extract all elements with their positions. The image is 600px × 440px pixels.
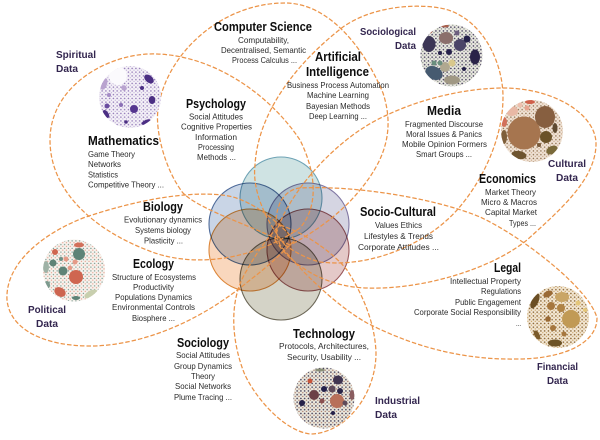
text block: mathematics: Game Theory (88, 149, 136, 159)
text block: media: Moral Issues & Panics (406, 129, 482, 139)
text block: biology: Evolutionary dynamics (124, 214, 202, 224)
text block: media: Fragmented Discourse (405, 119, 483, 129)
text block: computer science: Process Calculus ... (232, 55, 297, 65)
text block: ecology: Structure of Ecosystems (112, 272, 196, 282)
text block: biology: Plasticity ... (144, 236, 183, 246)
data label: spiritual (56, 49, 96, 75)
text block: legal: Corporate Social Responsibility (414, 307, 522, 317)
text block: artificial intelligence: Artificial (315, 50, 361, 64)
text block: computer science: Computability, (238, 35, 289, 45)
text block: sociology: Social Attitudes (176, 350, 230, 360)
text block: sociology: Social Networks (175, 381, 231, 391)
text block: artificial intelligence (287, 50, 389, 121)
central overlapping circles (209, 157, 349, 320)
text block: socio-cultural (358, 205, 439, 252)
text block: ecology: Biosphere ... (132, 313, 175, 323)
text block: mathematics (88, 134, 164, 190)
text block: biology: Biology (143, 200, 183, 214)
text block: technology: Technology (293, 327, 355, 341)
text block: sociology: Theory (191, 371, 216, 381)
text block: economics: Capital Market (485, 207, 538, 217)
data label: sociological: Sociological (360, 26, 416, 38)
text block: artificial intelligence: Machine Learning (307, 90, 369, 100)
text block: technology (279, 327, 369, 362)
data label: spiritual: Spiritual (56, 49, 96, 61)
text block: mathematics: Statistics (88, 170, 118, 180)
text block: computer science: Computer Science (214, 20, 312, 34)
text block: computer science: Decentralised, Semantic (221, 45, 306, 55)
text block: mathematics: Competitive Theory ... (88, 180, 164, 190)
sphere: political data (43, 239, 105, 302)
text block: legal (414, 261, 522, 328)
data label: industrial: Industrial (375, 395, 420, 407)
data label: cultural: Data (556, 172, 578, 184)
text block: media: Smart Groups ... (416, 149, 472, 159)
text block: psychology: Psychology (186, 97, 246, 111)
text block: technology: Security, Usability ... (287, 352, 361, 362)
text block: ecology (112, 257, 196, 323)
text block: psychology: Processing (198, 142, 234, 152)
text block: psychology (181, 97, 252, 162)
text block: artificial intelligence: Bayesian Methods (306, 101, 370, 111)
text block: economics: Micro & Macros (481, 197, 537, 207)
text block: media: Media (427, 104, 462, 118)
text block: psychology: Cognitive Properties (181, 122, 252, 132)
text block: economics: Market Theory (485, 187, 537, 197)
data label: industrial: Data (375, 409, 397, 421)
data label: industrial (375, 395, 420, 421)
data label: political (28, 304, 66, 330)
text block: legal: Intellectual Property (450, 276, 522, 286)
text block: sociology: Plume Tracing ... (174, 392, 232, 402)
text block: mathematics: Mathematics (88, 134, 159, 148)
sphere: industrial data (293, 367, 355, 429)
text block: economics (479, 172, 538, 228)
data label: spiritual: Data (56, 63, 78, 75)
text block: economics: Types ... (509, 218, 536, 228)
data label: cultural (548, 158, 586, 184)
text block: media: Mobile Opinion Formers (402, 139, 487, 149)
text block: economics: Economics (479, 172, 536, 186)
data label: political: Data (36, 318, 58, 330)
data label: political: Political (28, 304, 66, 316)
text block: socio-cultural: Lifestyles & Trends (364, 231, 433, 241)
text block: biology: Systems biology (135, 225, 192, 235)
text block: media (402, 104, 487, 159)
text block: socio-cultural: Values Ethics (375, 220, 422, 230)
text block: mathematics: Networks (88, 159, 121, 169)
data label: financial: Data (547, 375, 568, 387)
sphere: financial data (527, 286, 589, 348)
text block: ecology: Environmental Controls (112, 302, 195, 312)
text block: biology (124, 200, 202, 246)
text block: psychology: Methods ... (197, 152, 236, 162)
text block: artificial intelligence: Intelligence (306, 65, 369, 79)
data label: financial (537, 361, 578, 387)
text block: sociology (174, 336, 232, 402)
text block: sociology: Sociology (177, 336, 229, 350)
text block: legal: Legal (494, 261, 521, 275)
sphere: sociological data (420, 24, 484, 88)
data label: financial: Financial (537, 361, 578, 373)
text block: ecology: Ecology (133, 257, 174, 271)
sphere: cultural data (500, 99, 564, 163)
text block: legal: Public Engagement (455, 297, 522, 307)
text block: socio-cultural: Socio-Cultural (360, 205, 436, 219)
text block: artificial intelligence: Deep Learning ... (309, 111, 367, 121)
text block: technology: Protocols, Architectures, (279, 341, 369, 351)
text block: legal: ... (516, 318, 521, 328)
text block: psychology: Information (195, 132, 237, 142)
text block: sociology: Group Dynamics (174, 361, 232, 371)
sphere: spiritual data (99, 66, 161, 128)
text block: psychology: Social Attitudes (189, 112, 243, 122)
text block: legal: Regulations (481, 286, 521, 296)
text block: computer science (214, 20, 312, 65)
text block: socio-cultural: Corporate Attitudes ... (358, 242, 439, 252)
text block: ecology: Populations Dynamics (115, 292, 192, 302)
text block: artificial intelligence: Business Process Automation (287, 80, 389, 90)
data label: sociological: Data (395, 40, 416, 52)
data label: sociological (360, 26, 416, 52)
text block: ecology: Productivity (133, 282, 175, 292)
data label: cultural: Cultural (548, 158, 586, 170)
